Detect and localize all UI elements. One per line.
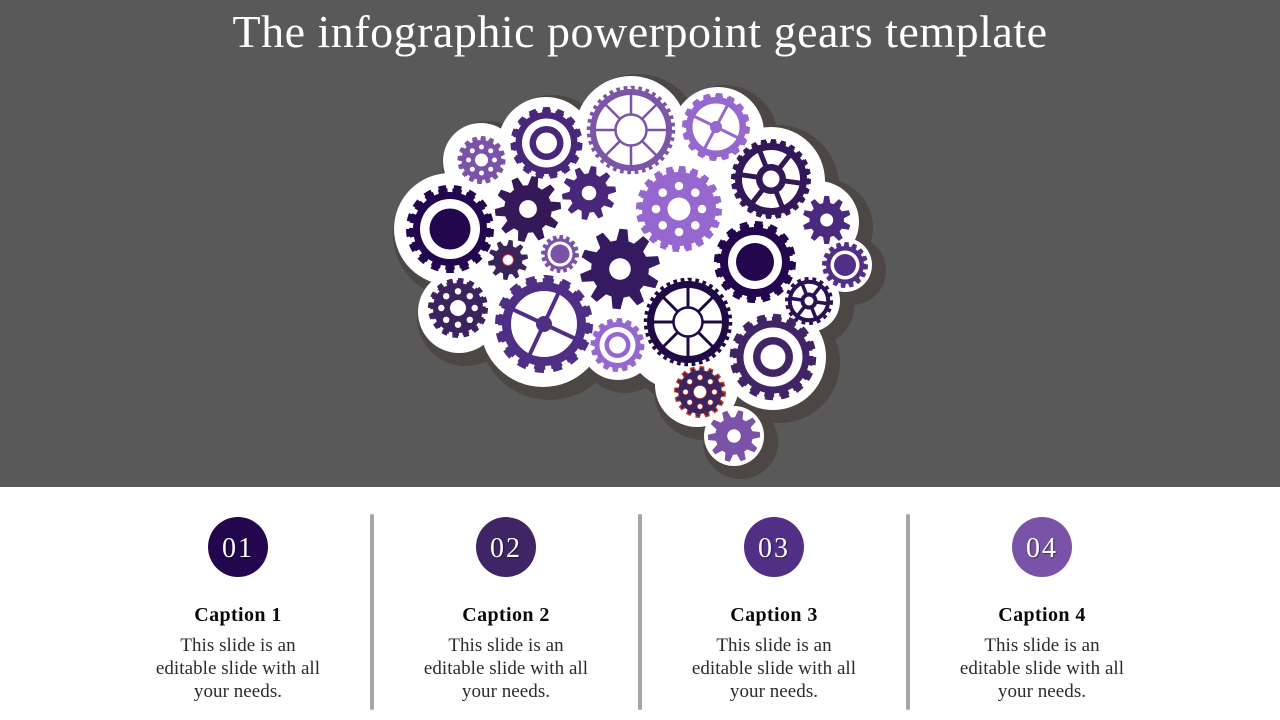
gear: four-spoked lavender [683,94,749,160]
number badge 01 [208,517,268,577]
gear: ringed top left [512,108,581,178]
number badge 04: 04 [1026,533,1058,564]
column 1 [156,517,320,702]
gear: large four-spoked lower left [497,277,591,371]
body text 1: This slide is an [180,635,296,656]
column 4 [960,517,1124,702]
body text 1: your needs. [194,681,282,702]
body text 2 [424,635,588,702]
body text 3: your needs. [730,681,818,702]
number badge 03 [744,517,804,577]
body text 3 [692,635,856,702]
body text 4 [960,635,1124,702]
body text 2: editable slide with all [424,658,588,679]
gear: small light purple with holes [458,137,504,183]
column 2 [424,517,588,702]
body text 2: your needs. [462,681,550,702]
body text 2: This slide is an [448,635,564,656]
brain shadow [400,82,878,472]
body text 4: your needs. [998,681,1086,702]
body text 1: editable slide with all [156,658,320,679]
gear: fine-toothed dark spoked centre [646,280,730,364]
caption 1: Caption 1 [194,604,282,626]
gear: dark with holes lower left [429,279,487,337]
number badge 02: 02 [490,533,522,564]
gear: ten-tooth right edge [803,196,851,244]
gear: large lavender with holes [638,168,720,250]
gear: largest dark left [408,187,492,271]
column 3 [692,517,856,702]
number badge 01: 01 [222,533,254,564]
caption 4: Caption 4 [998,604,1086,626]
gear: ten-tooth upper left [489,170,567,248]
number badge 03: 03 [758,533,790,564]
body text 3: editable slide with all [692,658,856,679]
gear: lavender ringed bottom centre [592,319,644,371]
gear: big ten-tooth centre [577,226,663,312]
gear: small ringed centre [542,236,578,272]
number badge 02 [476,517,536,577]
divider 2 [638,514,642,710]
body text 4: This slide is an [984,635,1100,656]
divider 3 [906,514,910,710]
brain white silhouette [394,76,872,466]
gear: ten-tooth bottom [702,404,766,468]
gear: fine-toothed spoked top centre [588,88,674,172]
gear: dark ringed right centre [716,222,794,302]
body text 4: editable slide with all [960,658,1124,679]
gear: large ringed lower right [732,316,814,398]
caption 3: Caption 3 [730,604,818,626]
caption 2: Caption 2 [462,604,550,626]
gear: orange outlined with holes [675,367,725,417]
dark header background [0,0,1280,487]
divider 1 [370,514,374,710]
gear: small ringed right edge [823,243,867,287]
gear: ten-tooth top centre [558,162,620,224]
brain of gears illustration [393,74,886,479]
gear: six-spoked dark upper right [732,140,810,218]
number badge 04 [1012,517,1072,577]
gear: tiny ten-tooth with red ring [485,237,531,283]
body text 1 [156,635,320,702]
body text 3: This slide is an [716,635,832,656]
title: The infographic powerpoint gears template [232,6,1048,57]
gear: small six-spoked right [786,278,832,324]
